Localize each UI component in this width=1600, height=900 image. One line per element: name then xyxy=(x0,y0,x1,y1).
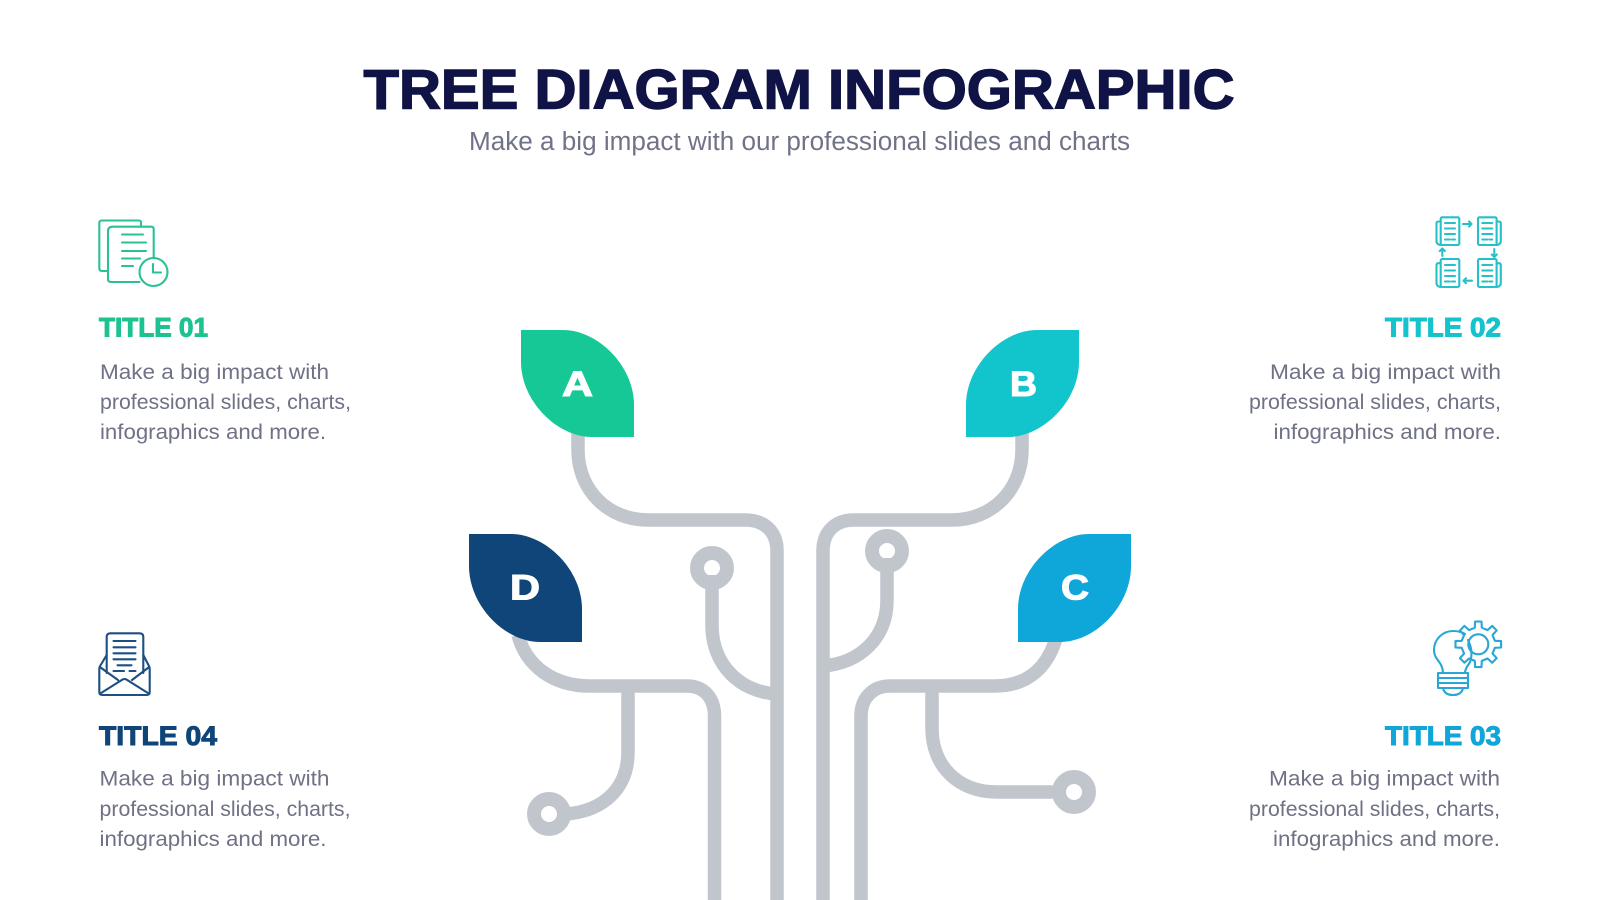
text block: Make a big impact with xyxy=(100,361,329,384)
twig with node: upper right xyxy=(823,536,902,666)
text block: infographics and more. xyxy=(100,828,326,851)
text block: Make a big impact with xyxy=(1269,768,1500,790)
icon: open envelope with letter xyxy=(99,633,150,695)
text block: infographics and more. xyxy=(1273,828,1500,851)
title: TREE DIAGRAM INFOGRAPHIC xyxy=(364,58,1234,120)
branch: B to trunk xyxy=(823,430,1022,900)
leaf D xyxy=(469,534,582,642)
text block: infographics and more. xyxy=(100,421,326,444)
leaf D: D xyxy=(510,568,540,608)
text block: professional slides, charts, xyxy=(100,391,351,414)
icon: documents with clock xyxy=(99,220,168,286)
heading: TITLE 03 xyxy=(1385,721,1501,751)
text block xyxy=(100,768,350,851)
text block: professional slides, charts, xyxy=(1249,798,1500,821)
twig with node: lower right xyxy=(932,686,1089,807)
leaf A: A xyxy=(562,365,593,404)
branch: D to trunk xyxy=(518,635,714,900)
heading: TITLE 01 xyxy=(99,313,208,343)
text block xyxy=(1249,768,1500,851)
subtitle: Make a big impact with our professional slides and charts xyxy=(469,128,1130,156)
text block xyxy=(1249,361,1501,444)
text block xyxy=(100,361,351,444)
leaf C: C xyxy=(1061,568,1089,608)
heading: TITLE 04 xyxy=(99,721,217,751)
panel: title 03 xyxy=(1249,622,1501,851)
branch: A to trunk xyxy=(578,430,777,900)
twig with node: upper left xyxy=(697,553,777,694)
panel: title 02 xyxy=(1249,217,1501,444)
panel: title 04 xyxy=(99,633,350,851)
icon: documents cycle xyxy=(1436,217,1501,287)
panel: title 01 xyxy=(99,220,351,444)
leaf B xyxy=(966,330,1079,437)
text block: Make a big impact with xyxy=(1270,361,1501,384)
leaf C xyxy=(1018,534,1131,642)
text block: infographics and more. xyxy=(1274,421,1501,444)
tree diagram xyxy=(518,430,1089,900)
heading: TITLE 02 xyxy=(1385,313,1501,343)
leaf B: B xyxy=(1010,365,1037,404)
text block: professional slides, charts, xyxy=(1249,391,1501,414)
text block: professional slides, charts, xyxy=(100,798,350,821)
leaf A xyxy=(521,330,634,437)
branch: C to trunk xyxy=(861,635,1057,900)
icon: light bulb with gear xyxy=(1434,622,1501,695)
text block: Make a big impact with xyxy=(100,768,330,790)
twig with node: lower left xyxy=(534,686,628,829)
